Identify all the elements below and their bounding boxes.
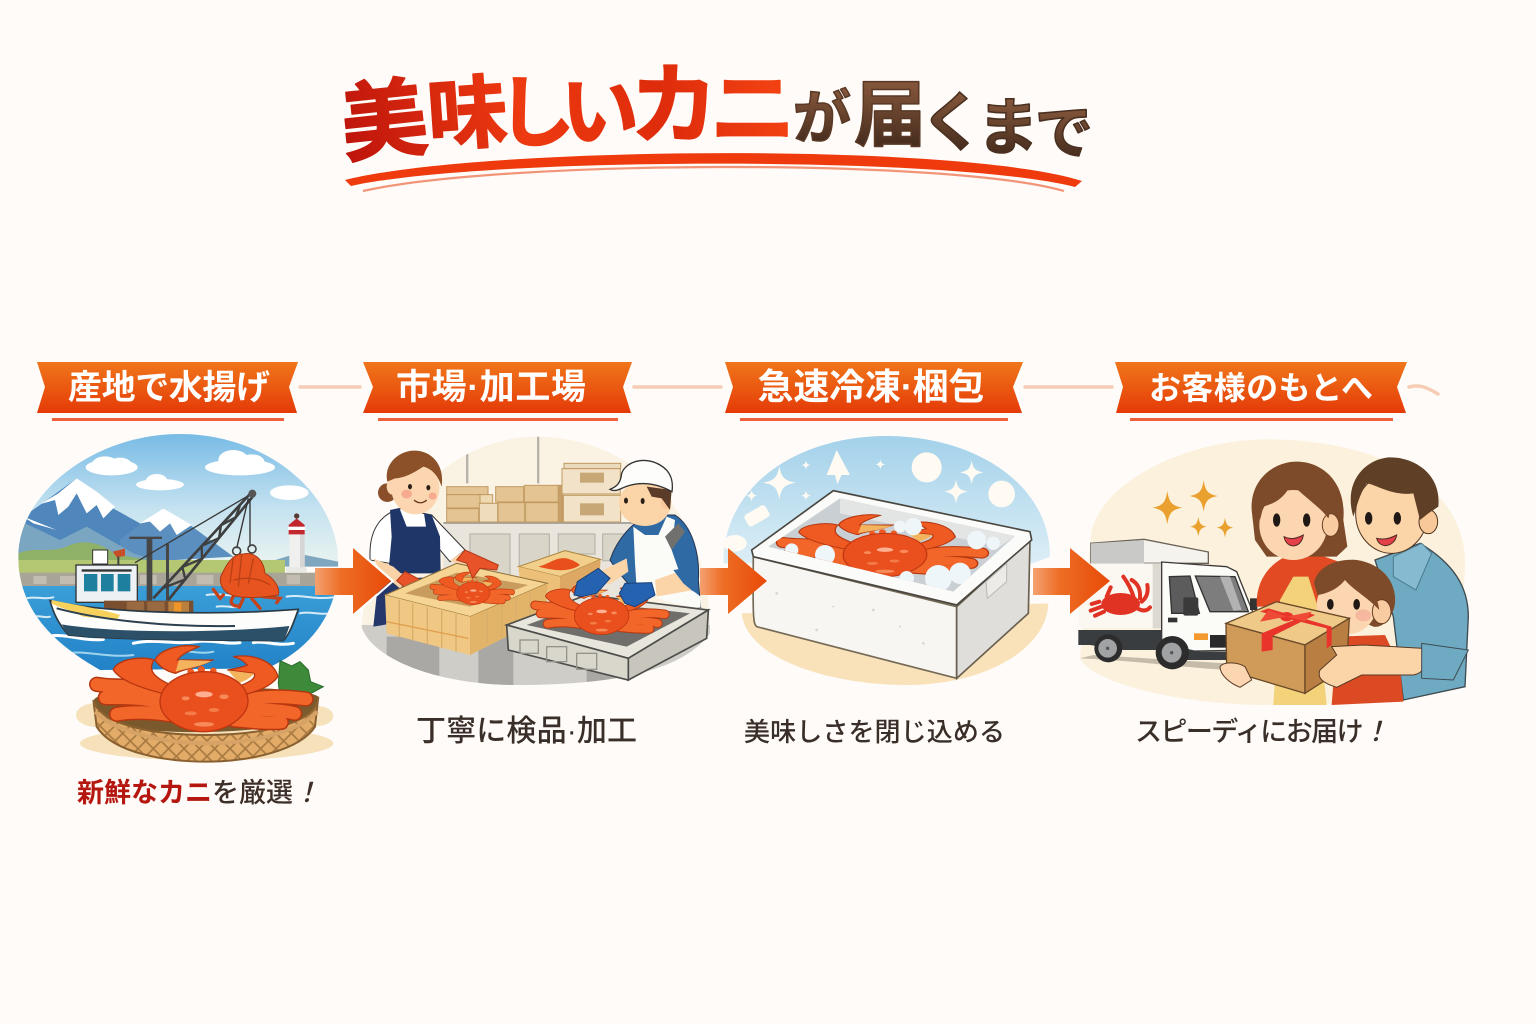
step 2 banner: 市場·加工場 <box>396 368 586 407</box>
woman <box>1252 462 1347 705</box>
title <box>336 56 1093 174</box>
step 1 banner: 産地で水揚げ <box>68 369 270 407</box>
process arrow 1 <box>315 546 393 616</box>
title: い <box>561 68 639 156</box>
step 3 banner: 急速冷凍·梱包 <box>758 366 984 407</box>
man worker <box>574 460 701 607</box>
connector lines <box>300 386 1438 394</box>
title: し <box>497 69 575 157</box>
title: ま <box>977 94 1039 163</box>
large yellow carton <box>385 563 547 655</box>
stacked cartons <box>447 463 621 522</box>
delivery truck <box>1078 539 1257 670</box>
boat hull <box>50 600 298 641</box>
basket crab <box>97 646 306 732</box>
boat cabin <box>76 549 137 602</box>
boat deck crates <box>104 600 194 612</box>
title: カ <box>630 56 718 155</box>
title: 届 <box>854 76 926 156</box>
scene 1: fishing boat at harbour <box>13 430 343 676</box>
step 1 banner <box>37 362 298 421</box>
process arrow 3 <box>1033 548 1110 614</box>
lighthouse <box>286 513 307 572</box>
basket shadow <box>76 703 333 761</box>
child <box>1314 560 1403 705</box>
scene 1: crab in bamboo basket <box>76 646 333 762</box>
man <box>1351 457 1468 700</box>
crane wire and masts <box>129 490 256 601</box>
step 2 banner <box>363 362 632 421</box>
title: 美 <box>336 70 432 174</box>
hanging crab <box>213 554 280 608</box>
title: が <box>793 86 851 151</box>
title: で <box>1035 101 1093 166</box>
caption 2: 丁寧に検品·加工 <box>416 715 637 748</box>
garnish leaves <box>278 661 323 697</box>
small carton of crab <box>518 551 601 597</box>
caption 4: スピーディにお届け！ <box>1135 717 1389 747</box>
crab on ice <box>783 515 1000 592</box>
sparkles and snowflakes <box>723 450 1015 552</box>
title: 味 <box>424 67 510 162</box>
process arrow 2 <box>700 548 767 614</box>
crab on tray <box>535 581 665 635</box>
gift box <box>1226 602 1349 693</box>
caption 1: 新鮮なカニを厳選！ <box>77 778 320 808</box>
caption 3: 美味しさを閉じ込める <box>744 717 1005 747</box>
title underline swoosh <box>345 153 1082 191</box>
basket <box>93 687 318 762</box>
scene 2: inspection at market <box>350 433 717 688</box>
ice-blue backdrop <box>723 436 1050 563</box>
gold sparkles <box>1152 480 1233 538</box>
step 4 banner: お客様のもとへ <box>1149 370 1373 406</box>
scene 3: frozen crab in styrofoam box <box>723 436 1050 685</box>
back wall panels <box>443 522 634 602</box>
floor <box>350 625 717 688</box>
title: ニ <box>710 62 796 158</box>
woman right glove <box>457 550 498 578</box>
step 3 banner <box>725 362 1023 421</box>
styrofoam box <box>752 491 1032 678</box>
crab in carton <box>433 572 512 605</box>
truck crab logo <box>1091 577 1150 616</box>
grey tray <box>507 595 708 680</box>
title: く <box>920 87 984 159</box>
woman worker <box>370 451 470 627</box>
sand backdrop <box>742 603 1048 685</box>
step 4 banner <box>1115 362 1407 421</box>
hands holding gift <box>1220 643 1468 687</box>
scene 4: family receives delivery <box>1078 439 1468 705</box>
